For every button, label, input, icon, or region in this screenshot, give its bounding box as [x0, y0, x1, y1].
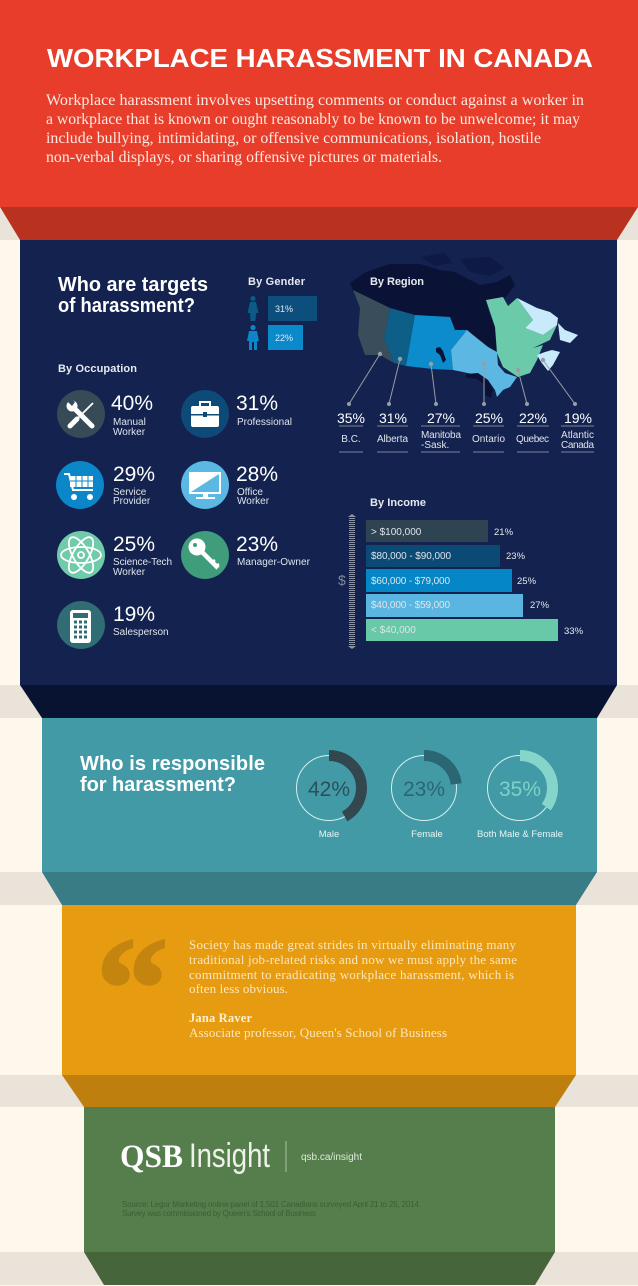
heading: targets	[58, 274, 208, 317]
intro text: a workplace that is known or ought reasonably to be known to be unwelcome; it may	[46, 111, 580, 128]
occupation: science-tech worker: 25%	[113, 533, 155, 556]
intro text: non-verbal displays, or sharing offensive pictures or materials.	[46, 149, 442, 166]
panel: quote	[62, 905, 576, 1107]
region statistics	[337, 410, 594, 452]
panel: header	[0, 0, 638, 240]
income chart: $40,000 - $59,000	[371, 600, 450, 611]
quote attribution	[189, 1011, 447, 1040]
gender chart	[247, 276, 317, 350]
occupation: science-tech worker: Science-Tech	[113, 557, 172, 568]
income chart: > $100,000	[371, 527, 422, 538]
source note: Source: Legor Marketing online panel of 1,501 Canadians surveyed April 21 to 25, 2014.	[122, 1200, 421, 1209]
north and Hudson Bay	[350, 253, 515, 352]
region statistics: Canada	[561, 440, 594, 451]
logo: QSB Insight: QSB	[120, 1139, 183, 1175]
donut: female 23%: 23%	[403, 778, 445, 801]
occupation: service provider: Provider	[113, 496, 151, 507]
donut: both 35%: Both Male & Female	[477, 829, 563, 840]
quote text: commitment to eradicating workplace harassment, which is	[189, 967, 514, 982]
quotation mark: “	[96, 909, 168, 1069]
region statistics: 27%	[427, 410, 455, 426]
donut: male 42%: Male	[319, 829, 339, 840]
heading: targets: of harassment?	[58, 295, 195, 317]
region statistics: Manitoba	[421, 430, 461, 441]
income scale: $	[338, 572, 346, 588]
occupation: salesperson: 19%	[113, 603, 155, 626]
Ontario region	[451, 330, 517, 397]
icon: male figure	[247, 325, 259, 350]
occupation: science-tech worker: Worker	[113, 567, 146, 578]
occupation: manager-owner	[181, 531, 311, 579]
heading: responsible: for harassment?	[80, 774, 236, 796]
occupation: manual worker: 40%	[111, 392, 153, 415]
income chart: 23%	[506, 551, 526, 562]
donut: both 35%	[477, 756, 563, 840]
gender chart: 31%	[275, 304, 293, 314]
occupation: manager-owner: 23%	[236, 533, 278, 556]
occupation: professional	[181, 390, 292, 438]
leader lines	[347, 352, 577, 406]
panel: footer	[84, 1107, 555, 1285]
quote text	[189, 937, 517, 996]
income scale	[338, 514, 356, 649]
intro text: Workplace harassment involves upsetting comments or conduct against a worker in	[46, 92, 584, 109]
occupation: office worker: 28%	[236, 463, 278, 486]
quote text: traditional job-related risks and now we must apply the same	[189, 952, 517, 967]
Quebec region	[486, 297, 557, 377]
map of Canada by region	[347, 253, 578, 406]
source note: Survey was commissioned by Queen's School of Business	[122, 1209, 316, 1218]
intro text: include bullying, intimidating, or offensive communications, isolation, hostile	[46, 130, 541, 147]
occupation: science-tech worker	[57, 531, 172, 579]
website: qsb.ca/insight	[301, 1152, 362, 1163]
income chart: By Income	[370, 497, 426, 509]
region statistics: 31%	[379, 410, 407, 426]
Atlantic Canada region	[517, 298, 578, 371]
region statistics: Ontario	[472, 434, 505, 445]
region statistics: 35%	[337, 410, 365, 426]
region statistics: 19%	[564, 410, 592, 426]
income chart	[338, 497, 584, 649]
donut: male 42%	[296, 756, 362, 840]
quote text: often less obvious.	[189, 981, 288, 996]
region statistics: B.C.	[341, 434, 361, 445]
Manitoba lakes	[436, 347, 446, 363]
occupation: manual worker	[57, 390, 153, 438]
panel: who are targets of harassment	[20, 240, 617, 718]
occupation: office worker: Worker	[237, 496, 270, 507]
region statistics: Atlantic	[561, 430, 594, 441]
quote text: Society has made great strides in virtually eliminating many	[189, 937, 516, 952]
Manitoba-Saskatchewan region	[406, 315, 467, 370]
B.C. region	[353, 290, 394, 363]
occupation: service provider	[56, 461, 155, 509]
heading: responsible: Who is responsible	[80, 753, 265, 775]
panel: who is responsible	[42, 718, 597, 905]
occupation: manual worker: Worker	[113, 427, 146, 438]
occupation: professional: 31%	[236, 392, 278, 415]
donut: both 35%: 35%	[499, 778, 541, 801]
income chart: 21%	[494, 527, 514, 538]
donut: female 23%: Female	[411, 829, 443, 840]
heading: responsible	[80, 753, 265, 796]
occupation: service provider: 29%	[113, 463, 155, 486]
income chart: $60,000 - $79,000	[371, 576, 450, 587]
quote attribution: Jana Raver	[189, 1011, 252, 1025]
logo: QSB Insight	[120, 1137, 286, 1175]
region subheading: By Region	[370, 276, 424, 288]
donut: male 42%: 42%	[308, 778, 350, 801]
occupation: salesperson: Salesperson	[113, 627, 169, 638]
Alberta region	[384, 308, 415, 366]
region statistics: Quebec	[516, 434, 549, 445]
heading: targets: Who are targets	[58, 274, 208, 296]
title: WORKPLACE HARASSMENT IN CANADA	[47, 43, 593, 73]
occupation: professional: Professional	[237, 417, 292, 428]
quote attribution: Associate professor, Queen's School of Business	[189, 1025, 447, 1040]
gender chart: By Gender	[248, 276, 306, 288]
occupation: manual worker: Manual	[113, 417, 146, 428]
income chart: 33%	[564, 626, 584, 637]
source note	[122, 1200, 421, 1218]
occupation subheading: By Occupation	[58, 363, 137, 375]
income chart: 27%	[530, 600, 550, 611]
region statistics: 22%	[519, 410, 547, 426]
occupation: office worker	[181, 461, 278, 509]
region statistics: Alberta	[377, 434, 408, 445]
income chart: < $40,000	[371, 625, 416, 636]
intro text	[46, 92, 584, 166]
logo: QSB Insight: Insight	[189, 1137, 270, 1175]
icon: female figure	[247, 296, 258, 321]
Great Lakes	[466, 373, 493, 398]
occupation: salesperson	[57, 601, 169, 649]
gender chart: 22%	[275, 333, 293, 343]
occupation: manager-owner: Manager-Owner	[237, 557, 311, 568]
donut: female 23%	[392, 756, 456, 840]
occupation: office worker: Office	[237, 487, 263, 498]
income chart: 25%	[517, 576, 537, 587]
region statistics: -Sask.	[421, 440, 449, 451]
occupation: service provider: Service	[113, 487, 147, 498]
region statistics: 25%	[475, 410, 503, 426]
income chart: $80,000 - $90,000	[371, 551, 451, 562]
